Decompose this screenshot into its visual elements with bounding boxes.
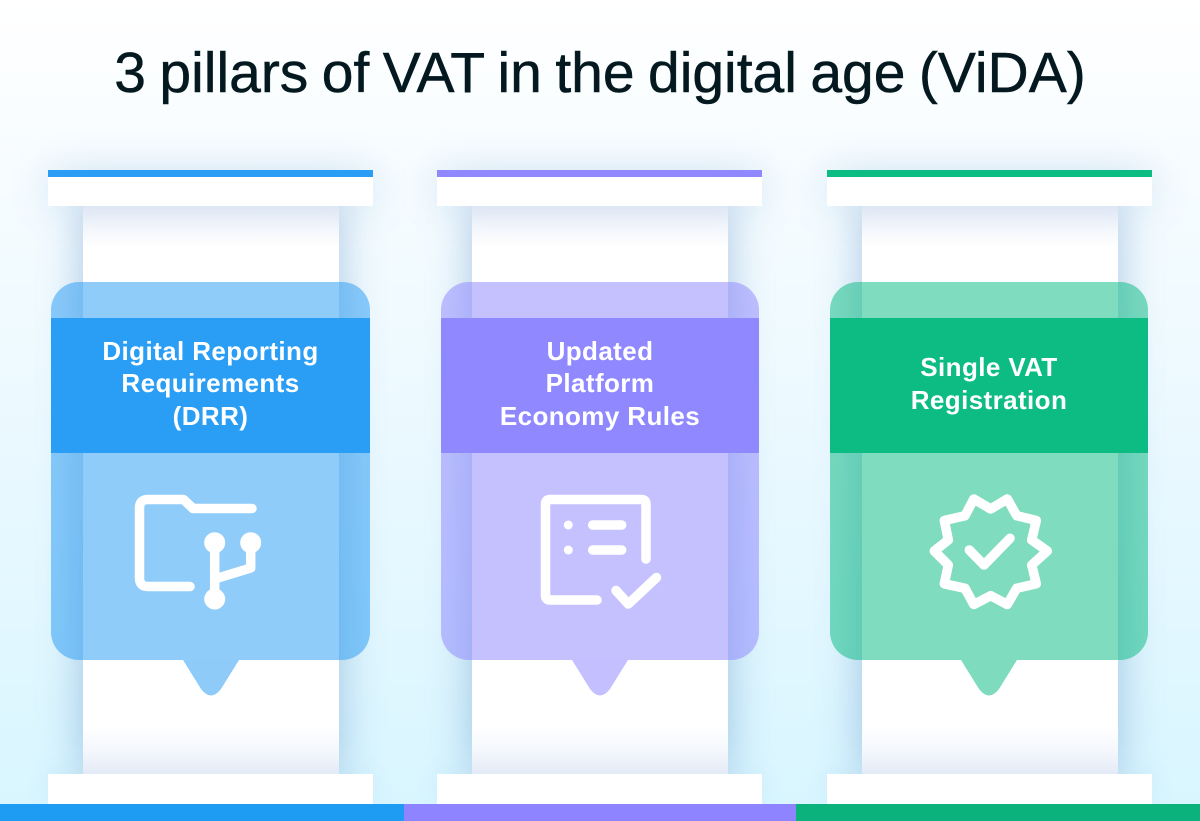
footer colour bar: blue segment	[0, 804, 404, 821]
callout pointer	[572, 660, 628, 696]
heading: Digital Reporting Requirements (DRR): Digital Reporting	[102, 336, 319, 366]
title: 3 pillars of VAT in the digital age (ViDA)	[114, 41, 1086, 105]
pillar shaft	[862, 206, 1118, 774]
callout pointer	[961, 660, 1017, 696]
pillar base	[827, 774, 1152, 804]
heading: Updated Platform Economy Rules	[441, 318, 759, 453]
pillar top cap	[48, 170, 373, 206]
heading: Single VAT Registration: Registration	[911, 384, 1067, 414]
panel: Digital Reporting Requirements pillar	[40, 154, 382, 804]
translucent callout card	[51, 282, 370, 660]
pillar top cap	[827, 170, 1152, 206]
icon: folder with branches	[134, 494, 262, 610]
footer colour bar: green segment	[796, 804, 1200, 821]
heading: Single VAT Registration: Single VAT	[920, 352, 1058, 382]
pillar base	[437, 774, 762, 804]
panel: Updated Platform Economy Rules pillar	[428, 154, 770, 804]
pillar shaft	[83, 206, 339, 774]
pillar base	[48, 774, 373, 804]
pillar shaft	[472, 206, 728, 774]
heading: Digital Reporting Requirements (DRR): Requirements	[121, 368, 300, 398]
heading: Updated Platform Economy Rules: Updated	[547, 336, 653, 366]
callout pointer	[183, 660, 239, 696]
footer colour bar: violet segment	[404, 804, 796, 821]
heading: Digital Reporting Requirements (DRR)	[51, 318, 370, 453]
heading: Digital Reporting Requirements (DRR): (DRR)	[173, 401, 248, 431]
translucent callout card	[830, 282, 1148, 660]
icon: verified badge	[930, 494, 1052, 610]
icon: checklist	[540, 494, 662, 609]
translucent callout card	[441, 282, 759, 660]
heading: Single VAT Registration	[830, 318, 1148, 453]
panel: Single VAT Registration pillar	[818, 154, 1160, 804]
heading: Updated Platform Economy Rules: Platform	[546, 368, 654, 398]
heading: Updated Platform Economy Rules: Economy Rules	[500, 401, 700, 431]
pillar top cap	[437, 170, 762, 206]
